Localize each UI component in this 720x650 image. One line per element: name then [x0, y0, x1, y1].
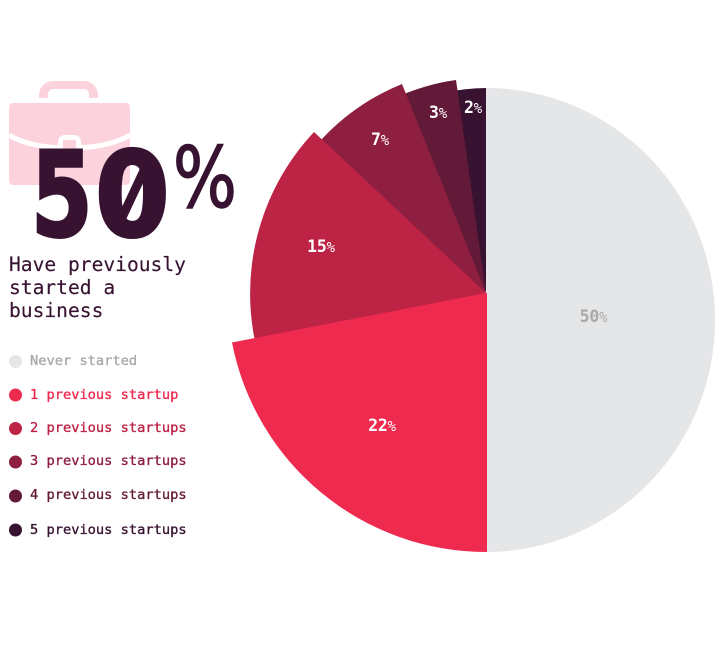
description text: Have previously — [9, 253, 186, 276]
slice: never started 50% — [486, 88, 715, 552]
label: 50%: 50% — [580, 307, 608, 326]
legend item: 3 previous startups: 3 previous startups — [30, 453, 187, 469]
description text: business — [9, 299, 103, 322]
big stat: 50% — [31, 126, 237, 264]
legend item: never started: Never started — [30, 353, 137, 369]
slice: 3 startups 7% — [314, 84, 486, 293]
legend item: 2 previous startups: 2 previous startups — [30, 420, 187, 436]
label: 7%: 7% — [371, 130, 390, 149]
label: 22%: 22% — [368, 416, 397, 435]
slice: 2 startups 15% — [250, 132, 486, 354]
icon: briefcase — [9, 81, 130, 185]
legend item: 4 previous startups: 4 previous startups — [30, 487, 187, 503]
big stat: 50%: 5 — [31, 126, 93, 264]
label: 2%: 2% — [464, 98, 483, 117]
slice: 4 startups 3% — [395, 80, 486, 293]
big stat: 50%: % — [173, 129, 237, 227]
legend — [9, 353, 187, 538]
big stat: 50%: 0 — [95, 126, 170, 264]
legend item: 1 previous startup: 1 previous startup — [30, 387, 178, 403]
slice: 1 startup 22% — [232, 293, 487, 552]
description text: started a — [9, 276, 115, 299]
slice: 5 startups 2% — [443, 88, 486, 293]
description text — [9, 253, 186, 322]
label: 3%: 3% — [429, 103, 448, 122]
label: 15%: 15% — [307, 237, 336, 256]
legend item: 5 previous startups: 5 previous startups — [30, 522, 187, 538]
pie chart — [232, 80, 715, 552]
